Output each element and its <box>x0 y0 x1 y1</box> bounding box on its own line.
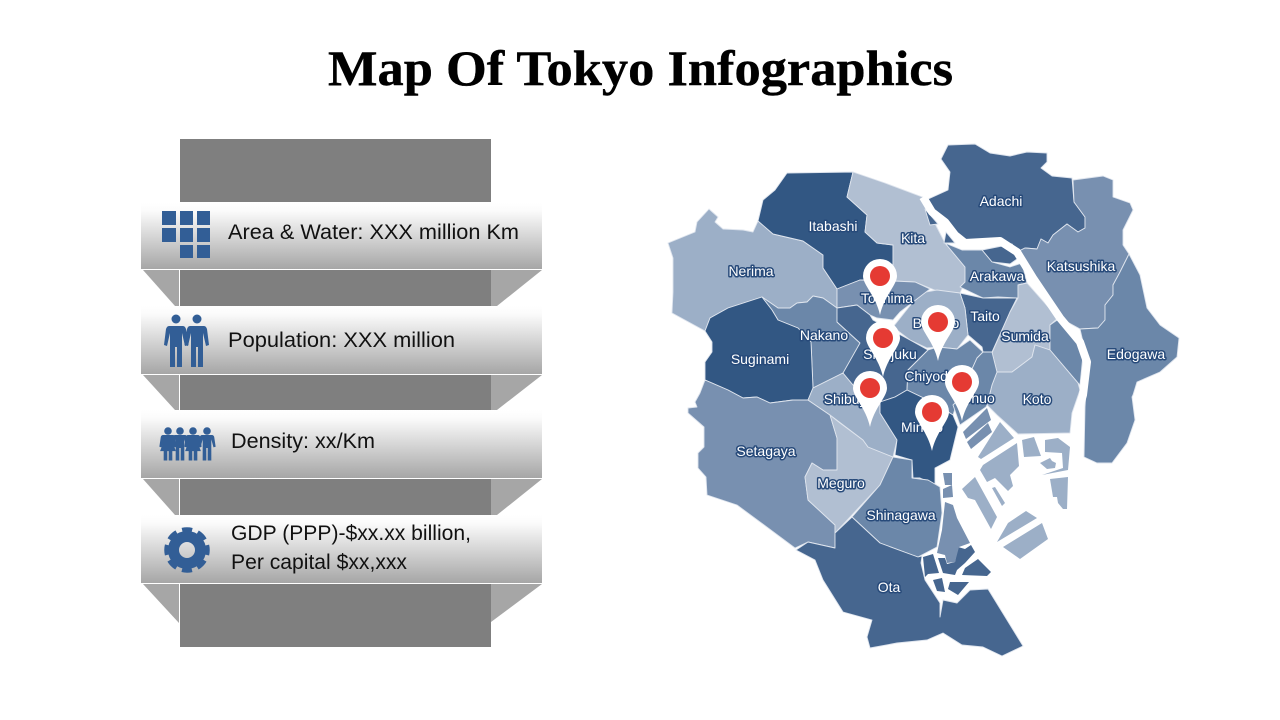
text: GDP: GDP (PPP)-$xx.xx billion, <box>231 522 471 545</box>
ward labels: Edogawa <box>1107 346 1165 362</box>
ward labels: Nakano <box>800 327 848 343</box>
ward labels: Arakawa <box>970 268 1024 284</box>
map pins <box>853 259 979 451</box>
ward labels: Suginami <box>731 351 789 367</box>
ward labels: Adachi <box>980 193 1022 209</box>
band: GDP <box>141 515 542 583</box>
connector 3 <box>143 479 542 515</box>
ward labels <box>728 193 1165 595</box>
title: Map Of Tokyo Infographics <box>328 40 953 96</box>
connector 1 <box>143 270 542 306</box>
bay islands <box>923 408 1070 595</box>
ward labels: Meguro <box>817 475 865 491</box>
icon: grid <box>162 211 210 258</box>
pin: Minato <box>915 395 949 451</box>
ward labels: Chuo <box>961 390 995 406</box>
ward labels: Itabashi <box>808 218 858 234</box>
ward labels: Toshima <box>861 290 913 306</box>
connector 4 with base <box>143 584 542 647</box>
pin: Chuo <box>945 365 979 421</box>
wards <box>668 144 1179 656</box>
band: area and water <box>141 203 542 269</box>
connector 2 <box>143 375 542 410</box>
band: population <box>141 306 542 374</box>
pin: Toshima <box>863 259 897 315</box>
text: density: Density: xx/Km <box>231 430 375 453</box>
icon: two people <box>164 314 209 367</box>
text: GDP <box>231 522 471 574</box>
text: area and water: Area & Water: XXX million Km <box>228 221 519 244</box>
gray backing top <box>180 139 491 202</box>
ward labels: Chiyoda <box>904 368 956 384</box>
text: GDP: Per capital $xx,xxx <box>231 551 407 574</box>
ward labels: Shinagawa <box>866 507 936 523</box>
icon: gear <box>168 530 206 570</box>
pin: Shibuya <box>853 371 887 427</box>
ward labels: Bunkyo <box>913 315 960 331</box>
pin: Shinjuku <box>866 321 900 377</box>
ward labels: Kita <box>901 230 925 246</box>
ward labels: Katsushika <box>1047 258 1115 274</box>
ward labels: Ota <box>878 579 900 595</box>
text: population: Population: XXX million <box>228 329 455 352</box>
pin: Bunkyo <box>921 305 955 361</box>
ward labels: Minato <box>901 419 943 435</box>
map of Tokyo <box>668 144 1179 656</box>
ward labels: Shinjuku <box>863 346 917 362</box>
panel: stacked stats <box>141 139 542 647</box>
ward labels: Sumida <box>1001 328 1049 344</box>
ward labels: Shibuya <box>824 391 875 407</box>
river <box>923 197 1087 436</box>
icon: four people <box>159 427 216 460</box>
ward labels: Nerima <box>728 263 774 279</box>
ward labels: Taito <box>970 308 1000 324</box>
ward labels: Koto <box>1023 391 1052 407</box>
ward labels: Setagaya <box>736 443 796 459</box>
band: density <box>141 410 542 478</box>
